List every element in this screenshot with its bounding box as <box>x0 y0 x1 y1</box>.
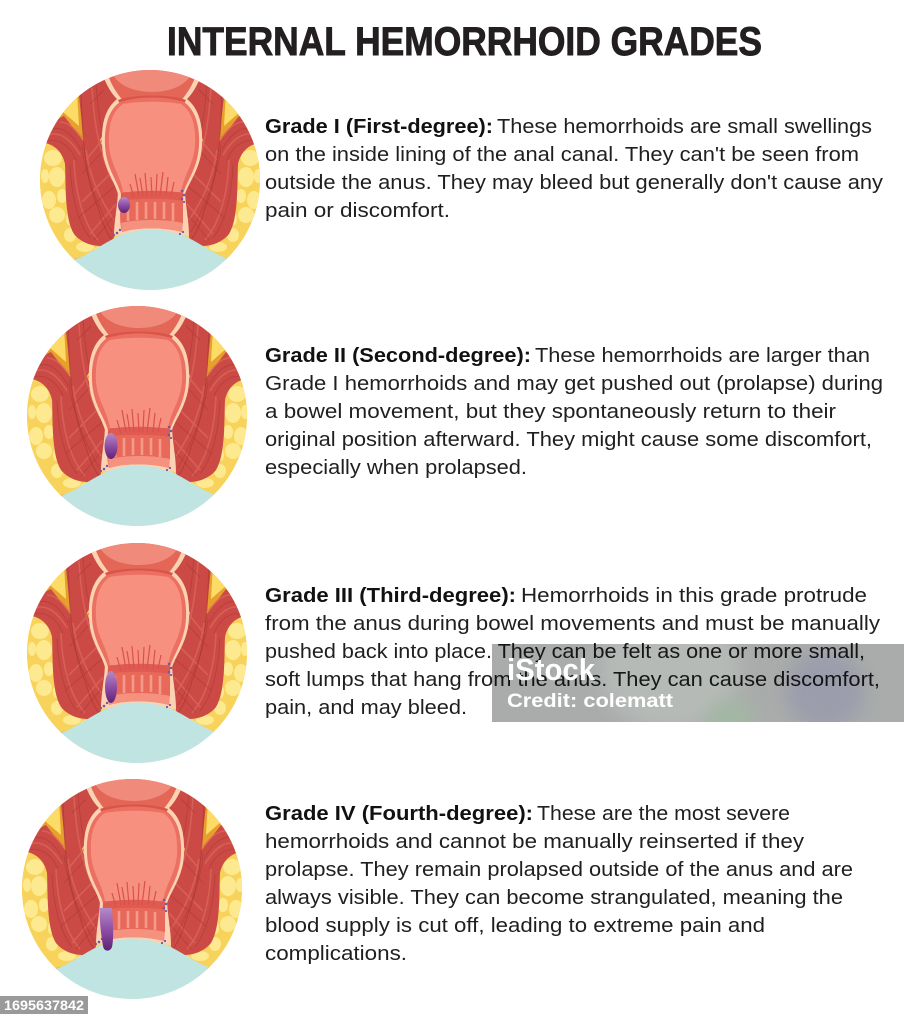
text: grade III description: pushed back into place. They can be felt as one or more small, <box>265 641 865 663</box>
text: grade II description: original position afterward. They might cause some discomfort, <box>265 429 872 451</box>
panel: grade I <box>36 68 883 292</box>
text: grade II description: These hemorrhoids are larger than <box>535 345 870 367</box>
watermark: iStock credit: iStock <box>507 652 596 687</box>
text: grade II description: Grade I hemorrhoids and may get pushed out (prolapse) during <box>265 373 883 395</box>
text: grade III description: Hemorrhoids in this grade protrude <box>521 585 867 607</box>
text: grade II description: a bowel movement, but they spontaneously return to their <box>265 401 836 423</box>
image id badge: 1695637842 <box>4 997 84 1013</box>
text: grade I description <box>265 116 883 222</box>
text: grade IV description: complications. <box>265 943 407 965</box>
text: grade III description: soft lumps that hang from the anus. They can cause discomfort, <box>265 669 880 691</box>
text: grade IV description: These are the most severe <box>537 803 790 825</box>
text: grade I description: Grade I (First-degree): <box>265 116 493 138</box>
text: grade IV description: prolapse. They remain prolapsed outside of the anus and are <box>265 859 853 881</box>
text: grade I description: outside the anus. They may bleed but generally don't cause any <box>265 172 883 194</box>
text: grade III description: Grade III (Third-degree): <box>265 585 516 607</box>
text: grade IV description <box>265 803 853 965</box>
panel: grade III <box>23 541 880 765</box>
text: grade III description: from the anus during bowel movements and must be manually <box>265 613 880 635</box>
text: grade IV description: blood supply is cut off, leading to extreme pain and <box>265 915 765 937</box>
diagram: grade II anatomy <box>23 304 254 528</box>
text: grade I description: on the inside lining of the anal canal. They can't be seen from <box>265 144 859 166</box>
diagram: grade III anatomy <box>23 541 254 765</box>
watermark: iStock credit: Credit: colematt <box>507 691 674 712</box>
diagram: grade I anatomy <box>36 68 267 292</box>
text: grade IV description: Grade IV (Fourth-degree): <box>265 803 533 825</box>
diagram: grade IV anatomy <box>18 777 249 1001</box>
watermark: iStock credit <box>492 644 904 722</box>
text: grade II description: especially when prolapsed. <box>265 457 527 479</box>
panel: grade IV <box>18 777 853 1001</box>
panel: grade II <box>23 304 883 528</box>
text: grade I description: These hemorrhoids are small swellings <box>497 116 872 138</box>
text: grade I description: pain or discomfort. <box>265 200 450 222</box>
text: grade III description <box>265 585 880 719</box>
text: grade II description: Grade II (Second-degree): <box>265 345 531 367</box>
text: grade II description <box>265 345 883 479</box>
text: grade IV description: always visible. They can become strangulated, meaning the <box>265 887 843 909</box>
text: grade III description: pain, and may bleed. <box>265 697 467 719</box>
text: grade IV description: hemorrhoids and cannot be manually reinserted if they <box>265 831 804 853</box>
title: INTERNAL HEMORRHOID GRADES <box>167 20 762 64</box>
